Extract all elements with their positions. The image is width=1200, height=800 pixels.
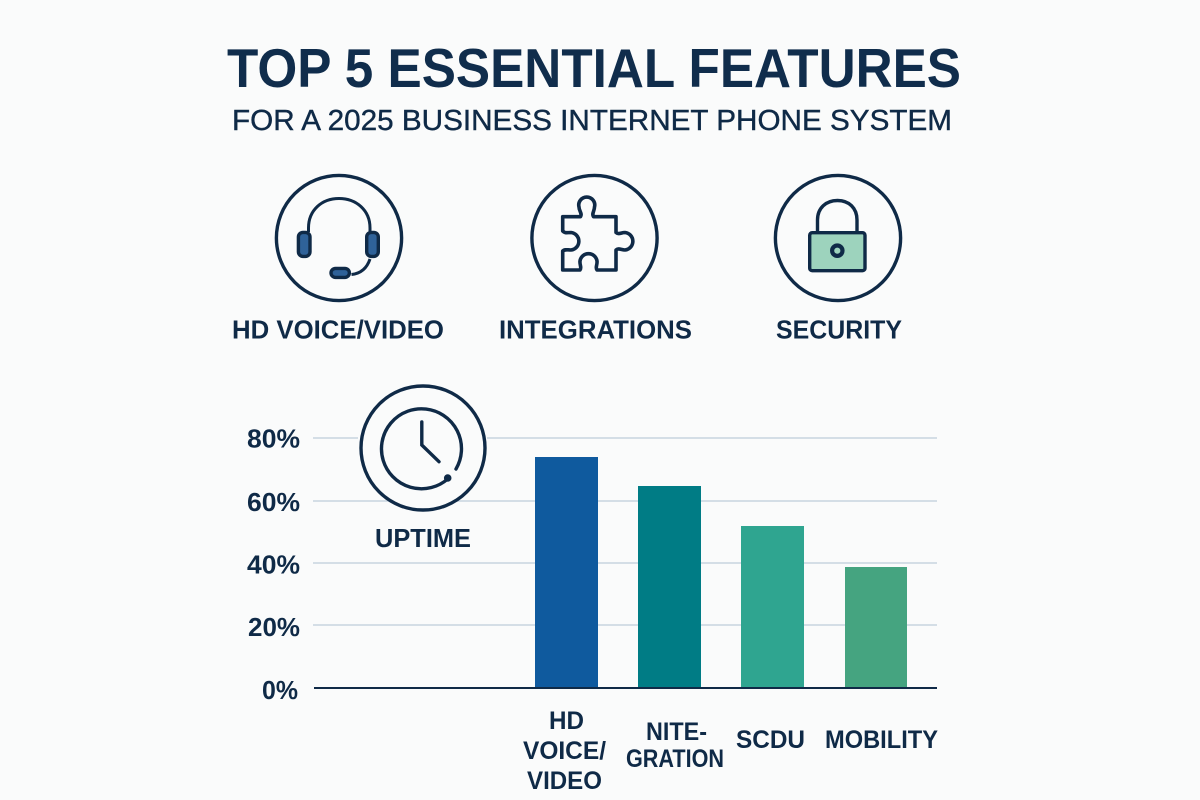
bar: integration — [638, 486, 701, 688]
icon: padlock — [775, 175, 901, 301]
label: security: SECURITY — [776, 314, 902, 344]
icon: puzzle piece — [532, 175, 657, 301]
feature: uptime — [361, 386, 485, 553]
y-axis labels: 0% — [262, 675, 298, 705]
bar: SCDU — [741, 526, 804, 688]
x label: HD voice/video: VIDEO — [527, 767, 602, 795]
bar: HD voice/video — [535, 457, 598, 688]
feature: integrations — [499, 175, 692, 344]
y-axis labels: 40% — [247, 549, 300, 579]
subtitle: FOR A 2025 BUSINESS INTERNET PHONE SYSTEM — [232, 105, 952, 137]
icon: clock — [361, 386, 485, 510]
label: HD voice/video: HD VOICE/VIDEO — [232, 314, 444, 344]
icon: headset — [276, 175, 402, 301]
x label: HD voice/video — [523, 707, 606, 795]
header — [227, 37, 961, 137]
feature: security — [775, 175, 902, 344]
y-axis labels: 20% — [248, 612, 300, 642]
bar: mobility — [845, 567, 907, 688]
x label: integration — [626, 718, 724, 773]
x axis — [314, 687, 937, 689]
label: uptime: UPTIME — [375, 523, 471, 553]
title: TOP 5 ESSENTIAL FEATURES — [227, 37, 961, 99]
label: integrations: INTEGRATIONS — [499, 314, 692, 344]
y-axis labels: 80% — [247, 424, 300, 454]
x label: integration: NITE- — [646, 718, 707, 746]
bar chart — [247, 424, 938, 795]
y-axis labels: 60% — [247, 487, 300, 517]
x label: integration: GRATION — [626, 745, 724, 773]
x label: HD voice/video: VOICE/ — [523, 737, 606, 765]
x label: HD voice/video: HD — [549, 707, 584, 735]
x label: SCDU: SCDU — [736, 726, 805, 754]
x label: mobility: MOBILITY — [825, 726, 938, 754]
y-axis labels — [247, 424, 300, 705]
feature: HD voice/video — [232, 175, 444, 344]
